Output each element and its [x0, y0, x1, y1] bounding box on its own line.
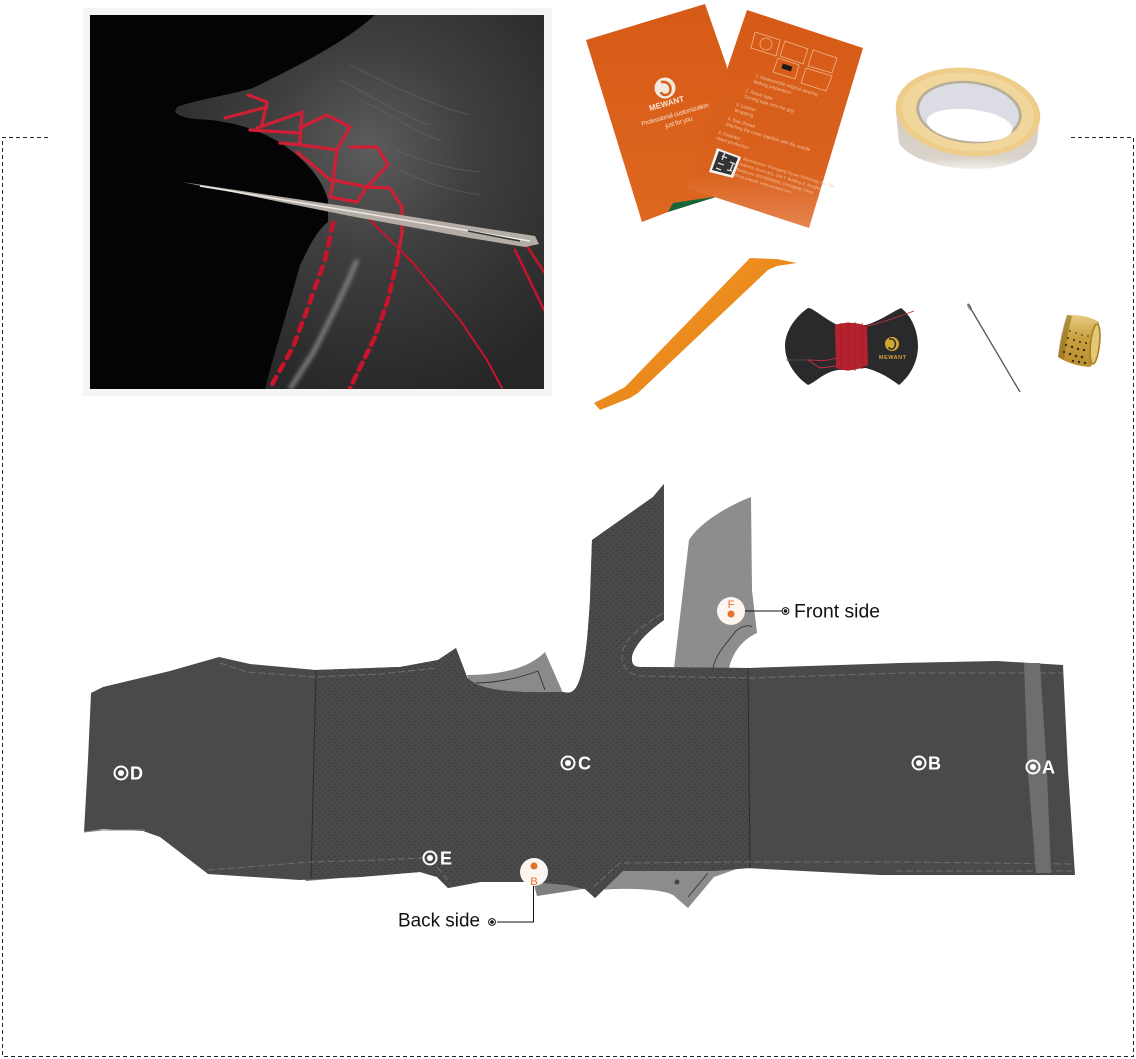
brand text: MEWANT [648, 94, 685, 113]
instruction text: Making preparation [753, 79, 792, 95]
grey flap: front side [674, 497, 757, 668]
instruction text: 4. Sew thread [727, 116, 756, 129]
label B [912, 754, 941, 774]
label E: E [440, 848, 452, 868]
photo: needle stitching leather [83, 8, 552, 396]
gold logo [885, 337, 899, 351]
thread stitches [270, 220, 544, 388]
badge: back side B: B [530, 876, 538, 888]
instruction text: 5. Finished [718, 130, 741, 141]
contact text: Official website: www.mewant.com [732, 172, 792, 195]
booklet: front cover [586, 4, 727, 222]
needle [182, 182, 539, 247]
booklet: back instructions [687, 10, 863, 228]
tagline: just for you [664, 115, 694, 130]
stitching [84, 613, 1072, 887]
contact text [732, 154, 835, 206]
instruction text: 1. Disassemble original steering [755, 73, 819, 97]
mini bobbin [781, 64, 792, 71]
label C: C [578, 754, 591, 774]
callout: back side: Back side [398, 910, 480, 932]
instruction text: Stitching the cover together with the needle [725, 122, 811, 152]
label E [424, 848, 452, 868]
label D [114, 764, 143, 784]
label A [1026, 758, 1055, 778]
leather body [84, 484, 1075, 898]
contact text: Telephone: 023-86868686, Chongqing, China [735, 166, 815, 195]
pry tool [594, 258, 797, 410]
seams [311, 668, 750, 879]
badge: back side B [520, 858, 548, 888]
label D: D [130, 764, 143, 784]
logo: swirl emblem [654, 78, 676, 98]
tape roll [891, 61, 1045, 169]
label B: B [928, 754, 941, 774]
perforated panel [311, 484, 750, 898]
badge: front side F [717, 597, 745, 625]
red thread winding [835, 323, 868, 370]
label C [562, 754, 591, 774]
gold brand text: MEWANT [879, 355, 907, 361]
tagline: Professional customization [641, 102, 710, 128]
step diagrams [751, 32, 837, 91]
label A: A [1042, 758, 1055, 778]
thimble [1058, 315, 1102, 367]
grey flap: upper left [467, 652, 563, 693]
instruction text: Hand production [716, 136, 750, 150]
instruction text [716, 68, 827, 168]
grey flaps: lower [297, 860, 745, 908]
instruction text: Turning tape onto the grip [743, 94, 795, 114]
callout: front side: Front side [794, 602, 880, 622]
thread bobbin [785, 308, 918, 385]
contact text: Address: Room 501, Unit 2, Building 3, Jiangbei [739, 161, 822, 191]
strap strip [1024, 663, 1051, 873]
inner hole [913, 76, 1025, 148]
QR code [709, 148, 741, 178]
instruction text: 3. Leather [735, 102, 757, 113]
sewing needle [967, 303, 1020, 392]
instruction text: Wrapping [734, 108, 754, 118]
callout: back side [398, 886, 534, 932]
contact text: Manufacturer: Chongqing Ziyuan Technology Co., Ltd [743, 156, 835, 189]
instruction text: 2. Attach tape [745, 88, 774, 101]
green inner sheet [668, 197, 716, 212]
callout: front side [745, 602, 880, 622]
steering wheel cover [84, 484, 1075, 908]
badge: front side F: F [728, 599, 735, 611]
